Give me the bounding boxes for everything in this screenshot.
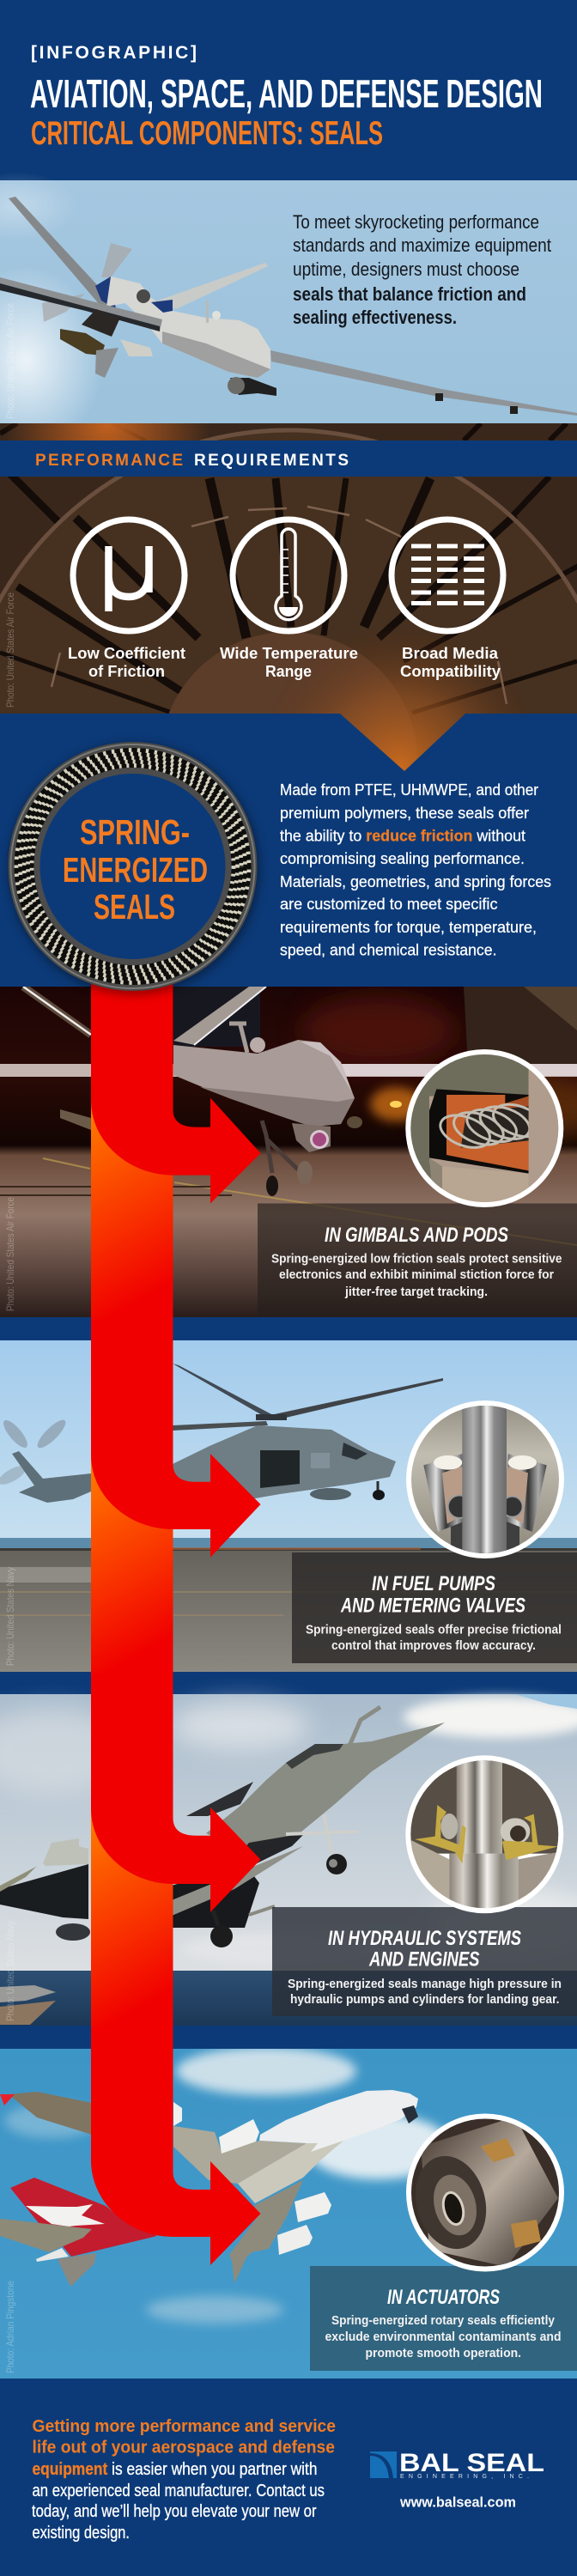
- callout heading: IN ACTUATORS: [387, 2286, 500, 2309]
- seal title: SEALS: [94, 887, 175, 927]
- requirement: broad media compatibility: [392, 519, 503, 680]
- callout body: hydraulic pumps and cylinders for landing gear.: [290, 1992, 560, 2007]
- photo credit: Photo: United States Air Force: [4, 592, 16, 708]
- callout: fuel pumps and metering valves: [292, 1552, 577, 1663]
- callout heading: [340, 1572, 525, 1618]
- website: www.balseal.com: [399, 2494, 516, 2511]
- seal title: SPRING-: [80, 812, 190, 852]
- illustration: helicopter: [0, 1364, 443, 1504]
- logo mark: [370, 2451, 397, 2478]
- label: [400, 644, 501, 680]
- footer call to action: life out of your aerospace and defense: [33, 2439, 335, 2458]
- seal ring badge: [9, 742, 259, 994]
- callout body: control that improves flow accuracy.: [331, 1638, 536, 1653]
- seal description text: requirements for torque, temperature,: [280, 919, 537, 936]
- seal description text: premium polymers, these seals offer: [280, 805, 529, 822]
- seal detail: cutaway on hydraulic rod: [404, 1753, 567, 1913]
- heading: PERFORMANCE: [35, 452, 183, 470]
- seal description text: are customized to meet specific: [280, 896, 498, 913]
- label: Range: [265, 662, 312, 680]
- callout body: electronics and exhibit minimal stiction force for: [279, 1267, 554, 1282]
- photo credit: Photo: Adrian Pingstone: [4, 2281, 16, 2373]
- callout body: [325, 2313, 562, 2360]
- heading bar: performance requirements: [0, 440, 577, 477]
- photo credit: Photo: United States Air Force: [4, 1197, 16, 1311]
- heading bar: performance requirements: REQUIREMENTS: [194, 452, 349, 470]
- arrow: flow to gimbals and pods: [91, 983, 261, 1323]
- label: Low Coefficient: [68, 644, 185, 662]
- callout: hydraulic systems and engines: [272, 1907, 577, 2016]
- callout body: Spring-energized seals manage high pressure in: [288, 1977, 562, 1991]
- footer call to action: an experienced seal manufacturer. Contact us: [33, 2482, 325, 2500]
- seal detail: cutaway on metering valve: [404, 1398, 567, 1561]
- footer call to action: [32, 2417, 336, 2543]
- label: Wide Temperature: [220, 644, 358, 662]
- arrow: flow to actuators: [91, 2028, 261, 2265]
- callout body: [288, 1977, 562, 2007]
- requirement: low coefficient of friction: [68, 519, 185, 680]
- seal description text: the ability to reduce friction without: [280, 828, 525, 845]
- requirement: wide temperature range: [220, 519, 358, 680]
- icon: media lines: [392, 519, 503, 631]
- icon: mu symbol: [73, 519, 185, 631]
- header: [30, 43, 543, 152]
- panel: section 1 photo, gimbals and pods: [0, 987, 577, 1317]
- intro text: uptime, designers must choose: [293, 258, 519, 280]
- callout body: jitter-free target tracking.: [344, 1285, 488, 1299]
- logo wordmark: BAL SEAL: [399, 2449, 544, 2477]
- callout heading: AND ENGINES: [368, 1947, 479, 1971]
- callout heading: IN FUEL PUMPS: [372, 1572, 495, 1595]
- callout body: exclude environmental contaminants and: [325, 2330, 562, 2344]
- seal title: ENERGIZED: [63, 850, 208, 890]
- intro text: [293, 211, 551, 328]
- callout heading: [328, 1927, 521, 1971]
- callout heading: IN GIMBALS AND PODS: [325, 1224, 508, 1247]
- panel: section 3 photo, hydraulic systems: [0, 1694, 577, 2026]
- panel: section 4 photo, actuators: [0, 2047, 577, 2379]
- panel: spring-energized intro with notch: [0, 714, 577, 987]
- callout body: Spring-energized rotary seals efficiently: [331, 2313, 556, 2328]
- seal description text: Materials, geometries, and spring forces: [280, 873, 551, 890]
- label: Compatibility: [400, 662, 501, 680]
- photo credit: Photo: United States Air Force: [4, 303, 16, 419]
- intro text: To meet skyrocketing performance: [293, 211, 539, 233]
- illustration: drone on tarmac: [0, 987, 577, 1196]
- photo credit: Photo: United States Navy: [4, 1567, 16, 1666]
- header eyebrow: [INFOGRAPHIC]: [31, 43, 197, 63]
- label: Broad Media: [402, 644, 499, 662]
- seal detail: cutaway in gimbal housing: [404, 1048, 567, 1211]
- seal description text: [280, 781, 551, 958]
- callout body: promote smooth operation.: [366, 2346, 521, 2360]
- subtitle: CRITICAL COMPONENTS: SEALS: [31, 115, 383, 152]
- label: of Friction: [88, 662, 165, 680]
- footer call to action: equipment is easier when you partner with: [33, 2460, 318, 2479]
- logo: Bal Seal Engineering: [370, 2449, 544, 2511]
- footer call to action: Getting more performance and service: [33, 2417, 336, 2436]
- footer call to action: today, and we’ll help you elevate your new or: [32, 2502, 317, 2521]
- seal description text: compromising sealing performance.: [280, 850, 525, 867]
- panel: section 2 photo, fuel pumps: [0, 1340, 577, 1672]
- label: [220, 644, 358, 680]
- intro text: sealing effectiveness.: [293, 307, 457, 328]
- panel: hero drone photo: [0, 172, 577, 455]
- illustration: drone in flight: [0, 197, 577, 416]
- illustration: airliner: [0, 2090, 418, 2287]
- panel: engine turbine background: [0, 423, 577, 771]
- label: [68, 644, 185, 680]
- logo tagline: ENGINEERING, INC.: [400, 2474, 529, 2480]
- callout: actuators: [310, 2266, 577, 2371]
- seal detail: rotary actuator: [404, 2112, 567, 2275]
- intro text: seals that balance friction and: [293, 283, 526, 305]
- photo credit: Photo: United States Navy: [4, 1921, 16, 2021]
- callout: gimbals and pods: [258, 1204, 577, 1317]
- arrow: flow to hydraulic systems: [91, 1674, 261, 2032]
- footer call to action: existing design.: [33, 2524, 130, 2543]
- seal title: [63, 812, 208, 927]
- seal description text: Made from PTFE, UHMWPE, and other: [280, 781, 538, 799]
- illustration: fighter jet: [0, 1707, 445, 1947]
- seal description text: speed, and chemical resistance.: [280, 941, 496, 958]
- arrow: flow to fuel pumps: [91, 1321, 261, 1678]
- icon: thermometer: [233, 519, 344, 631]
- callout body: [306, 1623, 562, 1653]
- callout body: [271, 1252, 562, 1299]
- callout heading: IN HYDRAULIC SYSTEMS: [328, 1927, 521, 1950]
